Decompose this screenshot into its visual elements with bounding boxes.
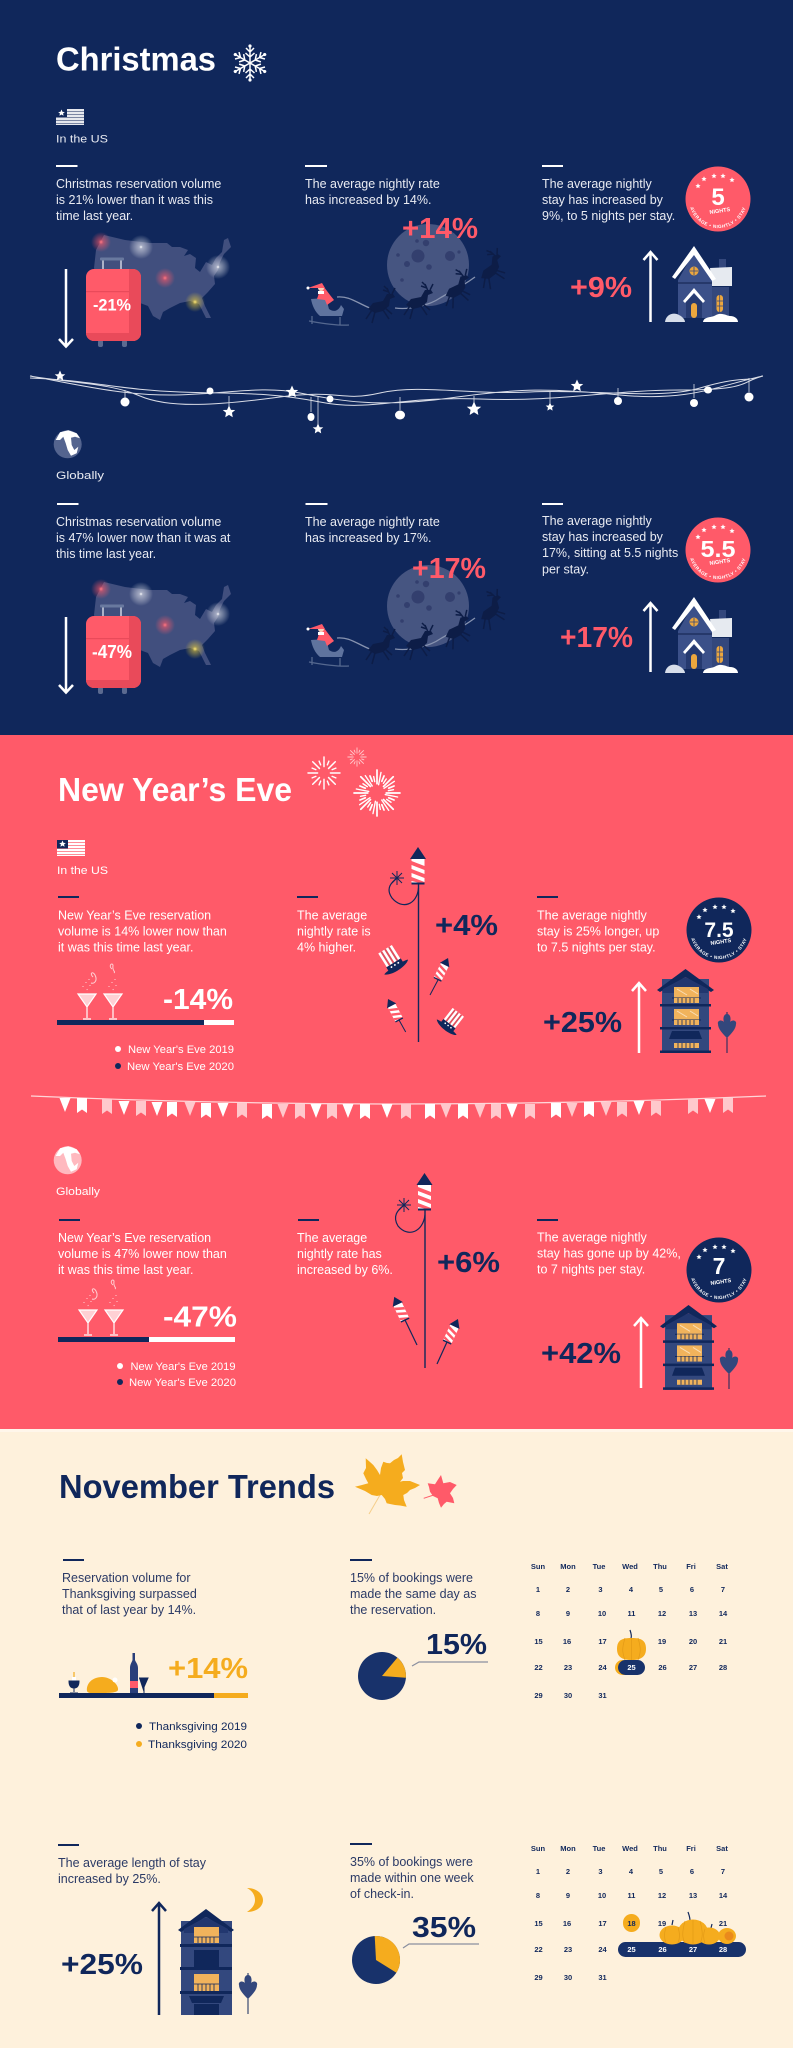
text: US volume: time last year. [56, 209, 133, 223]
text: global stay: The average nightly [542, 514, 653, 528]
text: same-day bookings: 15% of bookings were [350, 1571, 473, 1585]
text: global volume: volume is 47% lower now than [58, 1247, 227, 1261]
badge: 5.5 nights: NIGHTS [709, 558, 731, 567]
calendar weekdays: Sun [531, 1562, 545, 1571]
calendar: week of Thanksgiving: 22 [534, 1945, 543, 1954]
icon: tree [720, 1348, 738, 1389]
calendar weekdays: Mon [560, 1562, 576, 1571]
text: global stay: stay has gone up by 42%, [537, 1246, 681, 1260]
text: global volume: it was this time last year. [58, 1263, 193, 1277]
calendar: week of Thanksgiving: 9 [566, 1891, 570, 1900]
text: US rate: has increased by 14%. [305, 193, 431, 207]
calendar: Thanksgiving day: 15 [534, 1637, 543, 1646]
text: US volume: it was this time last year. [58, 940, 193, 954]
calendar: week of Thanksgiving: 16 [563, 1919, 571, 1928]
calendar weekdays: Mon [560, 1844, 576, 1853]
panel: Christmas [30, 40, 764, 694]
legend [136, 1721, 247, 1751]
calendar: Thanksgiving day: 12 [658, 1609, 666, 1618]
calendar weekdays: Wed [622, 1844, 638, 1853]
label: In the US: In the US [57, 865, 108, 877]
calendar: Thanksgiving day: 4 [629, 1585, 634, 1594]
icon: hat bottom [435, 1005, 468, 1038]
text: US stay: to 7.5 nights per stay. [537, 940, 656, 954]
calendar: week of Thanksgiving: 12 [658, 1891, 666, 1900]
icon: globe, New Year [54, 1146, 82, 1174]
text: global stay: per stay. [542, 562, 589, 576]
arrow: up [634, 1318, 648, 1388]
bar: 2019 vs 2020 [58, 1337, 235, 1342]
icon: mini rocket right [430, 956, 453, 995]
legend: New Year's Eve 2020 [129, 1377, 236, 1389]
stat: 15%: 15% [426, 1629, 487, 1661]
calendar: week of Thanksgiving: 11 [628, 1891, 635, 1900]
calendar: Thanksgiving day: 31 [598, 1691, 607, 1700]
block: global volume [58, 1219, 237, 1389]
icon: mini rocket right [437, 1317, 463, 1364]
icon: mini rocket left [389, 1294, 417, 1345]
legend: Thanksgiving 2020 [148, 1739, 247, 1751]
stat: +17%: +17% [412, 553, 486, 585]
arrow: down [59, 617, 73, 692]
badge: 7 nights: AVERAGE • NIGHTLY • STAY [691, 1278, 746, 1300]
text: US rate: 4% higher. [297, 940, 356, 954]
chart: 35% pie [352, 1936, 400, 1984]
icon: rocket with fuse [395, 1173, 432, 1368]
legend [117, 1361, 236, 1389]
text: US rate: nightly rate is [297, 924, 371, 938]
stat: -47%: -47% [163, 1302, 237, 1334]
highlight: 25 to 28: 26 [658, 1945, 667, 1954]
text: global rate: The average [297, 1231, 367, 1245]
badge: 7.5 nights: NIGHTS [710, 938, 732, 947]
calendar: Thanksgiving day: 6 [690, 1585, 694, 1594]
text: US volume: New Year’s Eve reservation [58, 908, 211, 922]
icon: US flag, Christmas [56, 109, 84, 125]
highlight: 25 to 28: 28 [719, 1945, 727, 1954]
text: US volume: is 21% lower than it was this [56, 193, 213, 207]
highlight: 18 [623, 1914, 640, 1932]
block: US rate [297, 847, 498, 1042]
legend: New Year's Eve 2019 [130, 1361, 236, 1373]
calendar: week of Thanksgiving: 21 [719, 1919, 727, 1928]
text: Thanksgiving volume: Thanksgiving surpassed [62, 1587, 197, 1601]
stat: -47%: -47% [92, 642, 132, 662]
arrow: up [632, 983, 646, 1053]
icon: pumpkin [617, 1630, 646, 1660]
calendar: week of Thanksgiving: 23 [564, 1945, 572, 1954]
text: global stay: 17%, sitting at 5.5 nights [542, 546, 678, 560]
text: one-week bookings: made within one week [350, 1871, 474, 1885]
stat: +42%: +42% [541, 1338, 621, 1370]
calendar: week of Thanksgiving: 5 [659, 1867, 663, 1876]
divider: string lights [30, 370, 763, 433]
calendar weekdays: Tue [593, 1562, 605, 1571]
highlight: 25 to 28 [618, 1942, 746, 1957]
stat: +14%: +14% [402, 213, 478, 245]
calendar: Thanksgiving day: 11 [628, 1609, 635, 1618]
arrow: down [59, 269, 73, 346]
text: US rate: The average [297, 908, 367, 922]
text: US stay: The average nightly [537, 908, 648, 922]
text: US stay: 9%, to 5 nights per stay. [542, 209, 675, 223]
legend: Thanksgiving 2019 [149, 1721, 247, 1733]
icon: pumpkins [660, 1912, 736, 1944]
label: Globally: Globally [56, 1186, 101, 1198]
highlight: 25 [615, 1660, 645, 1675]
icon: tree [718, 1012, 736, 1053]
icon: mini rocket left [383, 996, 406, 1032]
icon: building [657, 969, 714, 1053]
stat: +6%: +6% [437, 1247, 500, 1279]
calendar: Thanksgiving day: 3 [598, 1585, 603, 1594]
title: New Year's Eve: New Year’s Eve [58, 771, 292, 808]
calendar: Thanksgiving day: 20 [689, 1637, 697, 1646]
arrow: up [644, 252, 658, 322]
calendar weekdays: Wed [622, 1562, 638, 1571]
icon: globe, Christmas [54, 430, 82, 458]
badge: 5 nights: AVERAGE • NIGHTLY • STAY [690, 207, 746, 228]
chart: 15% pie [358, 1652, 406, 1700]
stat: 35%: 35% [412, 1912, 476, 1944]
text: global stay: stay has increased by [542, 530, 664, 544]
stat: -21%: -21% [93, 296, 131, 314]
calendar: Thanksgiving day: 22 [534, 1663, 543, 1672]
text: global rate: increased by 6%. [297, 1263, 393, 1277]
calendar: Thanksgiving day: 26 [658, 1663, 667, 1672]
stat: +25%: +25% [61, 1949, 143, 1981]
calendar: Thanksgiving day: 8 [536, 1609, 540, 1618]
calendar: week of Thanksgiving: 29 [534, 1973, 543, 1982]
badge: 5 nights [686, 166, 750, 232]
arrow: up [644, 603, 658, 672]
calendar weekdays: Thu [653, 1844, 667, 1853]
calendar: week of Thanksgiving: 19 [658, 1919, 666, 1928]
calendar: Thanksgiving day: 5 [659, 1585, 663, 1594]
badge: 7.5 nights: 7.5 [704, 919, 734, 942]
text: same-day bookings: the reservation. [350, 1603, 436, 1617]
stat: +25%: +25% [543, 1007, 622, 1039]
bar: 2019 vs 2020 [57, 1020, 234, 1025]
stat: +17%: +17% [560, 622, 633, 654]
badge: 7 nights: 7 [713, 1253, 725, 1279]
text: one-week bookings: 35% of bookings were [350, 1855, 473, 1869]
arrow: up [152, 1903, 166, 2015]
block: US volume [57, 896, 234, 1073]
highlight: 25: 25 [627, 1663, 636, 1672]
calendar: week of Thanksgiving: 24 [598, 1945, 607, 1954]
calendar: week of Thanksgiving: 17 [598, 1919, 607, 1928]
block: global volume [56, 503, 231, 694]
block: US volume [56, 165, 231, 347]
calendar weekdays [531, 1844, 728, 1853]
stat: +9%: +9% [570, 272, 632, 304]
map: global lights [91, 579, 231, 667]
block: Thanksgiving volume [59, 1559, 248, 1751]
label: Globally: Globally [56, 470, 105, 482]
text: US volume: Christmas reservation volume [56, 177, 221, 191]
icon: small maple leaf [424, 1475, 457, 1508]
calendar: week of Thanksgiving: 10 [598, 1891, 606, 1900]
calendar: week of Thanksgiving: 14 [719, 1891, 728, 1900]
text: same-day bookings: made the same day as [350, 1587, 476, 1601]
title: Christmas: Christmas [56, 40, 216, 78]
icon: snowy house [665, 246, 738, 322]
illustration: sleigh and moon [306, 565, 512, 666]
icon: large maple leaf [355, 1454, 420, 1514]
calendar: Thanksgiving day: 24 [598, 1663, 607, 1672]
calendar: week of Thanksgiving: 6 [690, 1867, 694, 1876]
calendar: Thanksgiving day: 21 [719, 1637, 727, 1646]
badge: 5.5 nights: 5.5 [700, 536, 736, 562]
icon: crescent moon [247, 1888, 263, 1912]
badge: 5.5 nights: AVERAGE • NIGHTLY • STAY [690, 558, 746, 580]
block: US rate [305, 165, 512, 325]
legend: New Year's Eve 2020 [127, 1061, 234, 1073]
calendar: week of Thanksgiving: 15 [534, 1919, 543, 1928]
calendar weekdays [531, 1562, 728, 1571]
calendar: Thanksgiving day: 10 [598, 1609, 606, 1618]
text: global rate: The average nightly rate [305, 515, 440, 529]
calendar: Thanksgiving day: 9 [566, 1609, 570, 1618]
badge: 7.5 nights [686, 898, 752, 962]
calendar weekdays: Thu [653, 1562, 667, 1571]
bar: 2019 vs 2020 [59, 1693, 248, 1698]
icon: building [660, 1305, 717, 1390]
icon: champagne glasses [79, 1280, 123, 1335]
block: same-day bookings [350, 1559, 488, 1700]
icon: tree [239, 1973, 257, 2014]
icon: snowy house [665, 597, 738, 673]
stat: -14%: -14% [163, 984, 233, 1016]
illustration: sleigh and moon [306, 224, 512, 325]
block: global stay [537, 1219, 752, 1390]
map: US lights [91, 232, 231, 320]
text: US rate: The average nightly rate [305, 177, 440, 191]
calendar weekdays: Sat [716, 1562, 728, 1571]
divider: bunting [31, 1096, 766, 1119]
label: In the US: In the US [56, 134, 108, 146]
calendar: Thanksgiving day: 28 [719, 1663, 727, 1672]
text: US stay: The average nightly [542, 177, 653, 191]
calendar weekdays: Sat [716, 1844, 728, 1853]
icon: rocket with fuse [389, 847, 426, 1042]
highlight: 25 to 28: 25 [627, 1945, 636, 1954]
calendar: week of Thanksgiving: 7 [721, 1867, 725, 1876]
calendar: Thanksgiving day: 17 [598, 1637, 607, 1646]
text: Thanksgiving volume: that of last year by 14%. [62, 1603, 196, 1617]
icon: US flag [57, 840, 85, 856]
calendar: Thanksgiving day [531, 1562, 728, 1700]
calendar weekdays: Fri [686, 1562, 696, 1571]
calendar: week of Thanksgiving: 30 [564, 1973, 572, 1982]
icon: dinner table items [69, 1653, 148, 1693]
calendar: week of Thanksgiving: 2 [566, 1867, 570, 1876]
text: global volume: this time last year. [56, 547, 156, 561]
block: length of stay [58, 1844, 263, 2015]
calendar: Thanksgiving day: 29 [534, 1691, 543, 1700]
block: global rate [297, 1173, 500, 1368]
text: US volume: volume is 14% lower now than [58, 924, 227, 938]
block: US stay [537, 896, 752, 1053]
calendar: week of Thanksgiving: 3 [598, 1867, 603, 1876]
badge: 7 nights [686, 1238, 752, 1302]
icon: suitcase [86, 258, 141, 347]
block: one-week bookings [350, 1843, 479, 1984]
stat: +14%: +14% [168, 1653, 248, 1685]
text: global rate: nightly rate has [297, 1247, 382, 1261]
calendar weekdays: Sun [531, 1844, 545, 1853]
block: global rate [305, 503, 512, 666]
badge: 5 nights: 5 [711, 184, 725, 211]
calendar: Thanksgiving day: 27 [689, 1663, 697, 1672]
stat: +4%: +4% [435, 910, 498, 942]
calendar: week of Thanksgiving: 1 [536, 1867, 540, 1876]
calendar: Thanksgiving day: 30 [564, 1691, 572, 1700]
text: one-week bookings: of check-in. [350, 1887, 414, 1901]
text: global stay: to 7 nights per stay. [537, 1262, 645, 1276]
text: US stay: stay has increased by [542, 193, 664, 207]
badge: 7.5 nights: AVERAGE • NIGHTLY • STAY [691, 938, 746, 960]
highlight: 18: 18 [627, 1919, 636, 1928]
icon: suitcase [86, 604, 141, 694]
badge: 7 nights: NIGHTS [710, 1278, 732, 1287]
block: global stay [542, 503, 750, 673]
text: global rate: has increased by 17%. [305, 531, 431, 545]
calendar weekdays: Tue [593, 1844, 605, 1853]
calendar: Thanksgiving day: 1 [536, 1585, 540, 1594]
calendar: Thanksgiving day: 13 [689, 1609, 697, 1618]
title: November Trends: November Trends [59, 1468, 335, 1505]
calendar: Thanksgiving day: 23 [564, 1663, 572, 1672]
text: Thanksgiving volume: Reservation volume for [62, 1571, 191, 1585]
icon: snowflake [232, 44, 268, 82]
panel: New Year's Eve [0, 735, 793, 1432]
calendar weekdays: Fri [686, 1844, 696, 1853]
text: global volume: is 47% lower now than it was at [56, 531, 231, 545]
text: US stay: stay is 25% longer, up [537, 924, 659, 938]
highlight: 25 to 28: 27 [689, 1945, 697, 1954]
calendar: week of Thanksgiving [531, 1844, 746, 1982]
calendar: week of Thanksgiving: 8 [536, 1891, 540, 1900]
text: length of stay: increased by 25%. [58, 1872, 161, 1886]
block: US stay [542, 165, 750, 322]
calendar: week of Thanksgiving: 4 [629, 1867, 634, 1876]
calendar: Thanksgiving day: 14 [719, 1609, 728, 1618]
calendar: week of Thanksgiving: 31 [598, 1973, 607, 1982]
calendar: week of Thanksgiving: 13 [689, 1891, 697, 1900]
text: global volume: New Year’s Eve reservation [58, 1231, 211, 1245]
icon: building [178, 1909, 234, 2015]
calendar: Thanksgiving day: 2 [566, 1585, 570, 1594]
icon: champagne glasses [78, 964, 122, 1019]
legend: New Year's Eve 2019 [128, 1044, 234, 1056]
calendar: Thanksgiving day: 16 [563, 1637, 571, 1646]
badge: 5.5 nights [686, 518, 750, 582]
panel: November Trends [0, 1432, 793, 2048]
icon: hat top [373, 942, 410, 978]
calendar: Thanksgiving day: 7 [721, 1585, 725, 1594]
text: length of stay: The average length of stay [58, 1856, 207, 1870]
badge: 5 nights: NIGHTS [709, 207, 731, 216]
text: global volume: Christmas reservation volume [56, 515, 221, 529]
legend [115, 1044, 234, 1073]
calendar: Thanksgiving day: 19 [658, 1637, 666, 1646]
icon: fireworks [308, 748, 402, 818]
text: global stay: The average nightly [537, 1230, 648, 1244]
